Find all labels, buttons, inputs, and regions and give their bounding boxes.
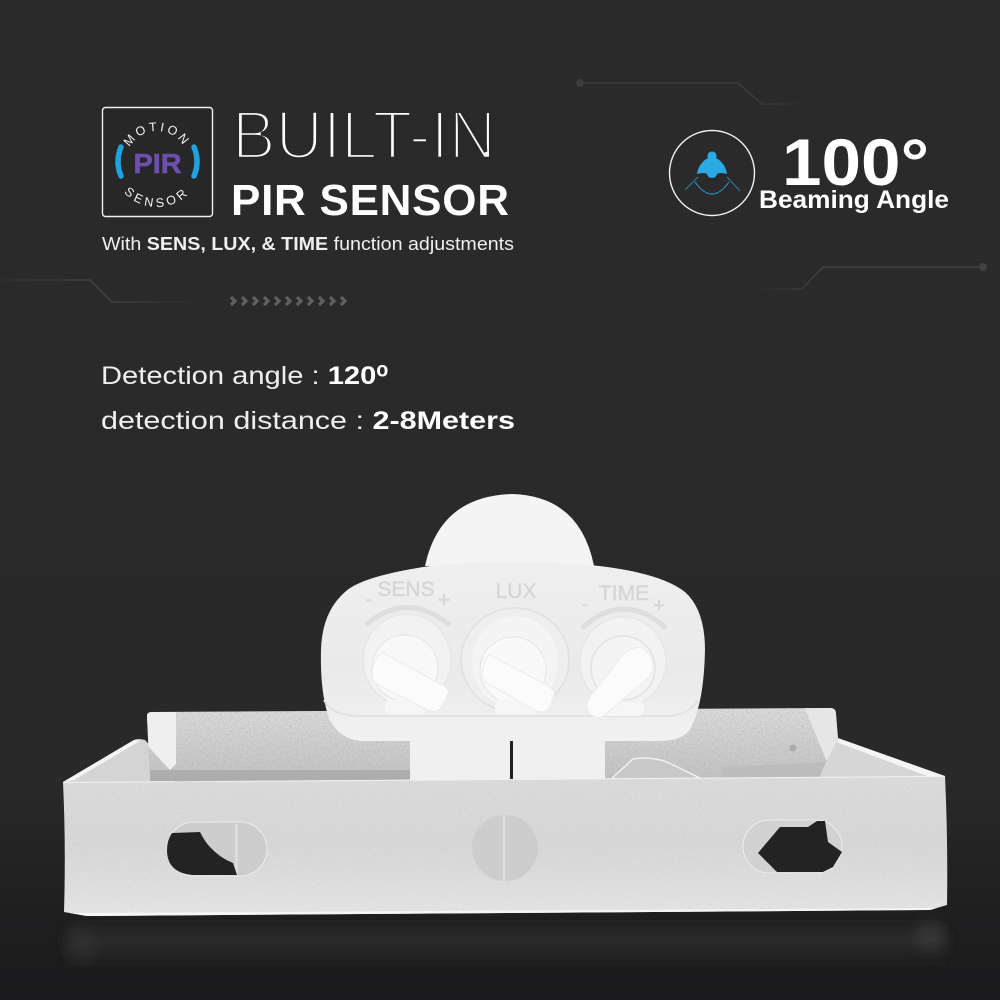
heading: BUILT-IN: BUILT-IN xyxy=(232,96,496,174)
circuit line right xyxy=(755,263,987,289)
sensor control housing xyxy=(321,562,705,741)
badge arcs xyxy=(118,147,197,176)
bracket right inner flank xyxy=(790,739,945,779)
control labels: + xyxy=(438,587,450,612)
dial LUX xyxy=(461,608,569,715)
chevron row xyxy=(231,297,345,305)
icon: beaming angle bell xyxy=(670,130,754,216)
floor reflection xyxy=(66,921,946,966)
control labels: LUX xyxy=(496,580,536,603)
control labels: TIME xyxy=(599,582,649,605)
badge text: SENSOR: SENSOR xyxy=(125,188,188,208)
circuit line top right xyxy=(576,79,815,104)
badge text: MOTION: MOTION xyxy=(123,122,190,146)
bracket back plate xyxy=(140,705,840,785)
spec: detection distance: detection distance : 2-8Meters xyxy=(101,407,515,435)
stat: 100 degrees: 100° xyxy=(782,125,929,199)
dial SENS xyxy=(363,608,451,715)
control labels: + xyxy=(653,595,665,617)
circuit line left xyxy=(0,280,205,302)
spec: detection angle: Detection angle : 120⁰ xyxy=(101,362,388,390)
stat label: Beaming Angle: Beaming Angle xyxy=(759,186,949,214)
subheading: function adjustments: With SENS, LUX, & TIME function adjustments xyxy=(102,234,514,254)
control labels xyxy=(366,578,665,617)
badge text: PIR: PIR xyxy=(134,148,182,179)
heading: PIR SENSOR: PIR SENSOR xyxy=(231,176,509,225)
mounting bolt xyxy=(611,758,702,779)
bracket left inner flank xyxy=(63,739,175,782)
sensor stem xyxy=(410,735,605,781)
left slot xyxy=(167,822,267,876)
product: PIR sensor mounting bracket xyxy=(60,494,950,919)
control labels: - xyxy=(582,594,588,614)
icon: PIR motion sensor badge xyxy=(102,106,214,218)
control labels: - xyxy=(366,589,372,609)
right slot xyxy=(743,820,842,873)
dial TIME xyxy=(580,609,666,718)
bracket front plate xyxy=(60,773,950,919)
control labels: SENS xyxy=(377,578,435,601)
centre knockout xyxy=(472,815,538,881)
sensor dome xyxy=(425,494,594,566)
back plate screw hole xyxy=(790,744,796,752)
